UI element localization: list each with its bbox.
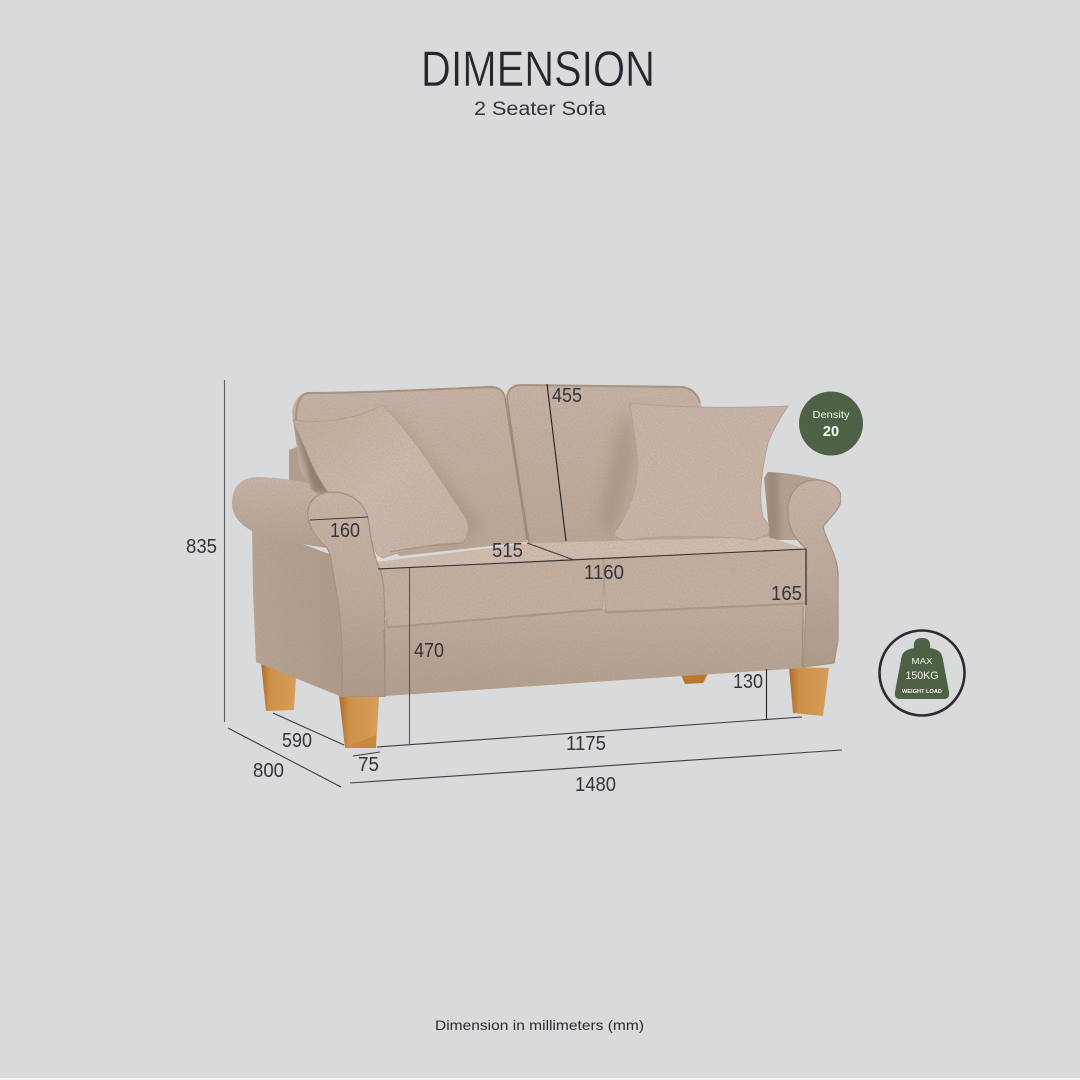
dimension label: inner depth: 590	[282, 730, 312, 752]
back cushion: right	[507, 384, 770, 546]
dimension label: seat depth: 515	[492, 540, 523, 562]
back cushion: left	[292, 386, 527, 556]
density badge: 20	[823, 424, 839, 440]
subtitle: 2 Seater Sofa	[474, 98, 606, 120]
sofa illustration	[232, 384, 841, 748]
seat top	[376, 537, 806, 570]
pillow: right	[615, 403, 788, 540]
pillow shadow on right cushion	[601, 416, 636, 528]
right arm face	[788, 480, 841, 667]
density badge	[799, 392, 863, 456]
dimension label: leg width: 75	[358, 754, 379, 776]
right arm rear	[764, 472, 822, 540]
base front	[385, 598, 805, 696]
right arm rear shadow	[764, 470, 780, 540]
dimension label: arm width: 160	[330, 520, 360, 542]
left arm face	[308, 492, 385, 697]
dimension label: back height: 455	[552, 385, 582, 407]
weight load badge	[880, 630, 964, 716]
dimension label: seat height: 470	[414, 640, 444, 662]
sofa upholstery	[232, 384, 841, 697]
weight load badge: 150KG	[906, 670, 938, 682]
front cushion: left	[378, 558, 604, 628]
icon: weight	[895, 638, 949, 699]
sofa legs	[261, 662, 829, 748]
rear panel	[289, 447, 315, 490]
footnote: Dimension in millimeters (mm)	[435, 1017, 644, 1033]
left arm roll	[232, 477, 369, 550]
dimension lines	[224, 380, 842, 787]
dimension label: seat width: 1160	[584, 562, 624, 584]
dimension label: overall height: 835	[186, 536, 217, 558]
dimension label: clearance: 130	[733, 671, 763, 693]
pillow: left	[293, 405, 468, 558]
weight load badge: WEIGHT LOAD	[902, 689, 942, 695]
dimension label: cushion height: 165	[771, 583, 802, 605]
pillow shadow on left cushion	[293, 408, 480, 548]
cushion piping and seams	[296, 385, 805, 696]
dimension label: inner width: 1175	[566, 733, 606, 755]
left arm side panel	[252, 525, 360, 697]
density badge: Density	[812, 409, 850, 421]
title: DIMENSION	[421, 41, 655, 97]
weight load badge: MAX	[912, 656, 933, 666]
front cushion: right	[604, 549, 806, 613]
dimension label: overall depth: 800	[253, 760, 284, 782]
dimension label: overall width: 1480	[575, 774, 616, 796]
